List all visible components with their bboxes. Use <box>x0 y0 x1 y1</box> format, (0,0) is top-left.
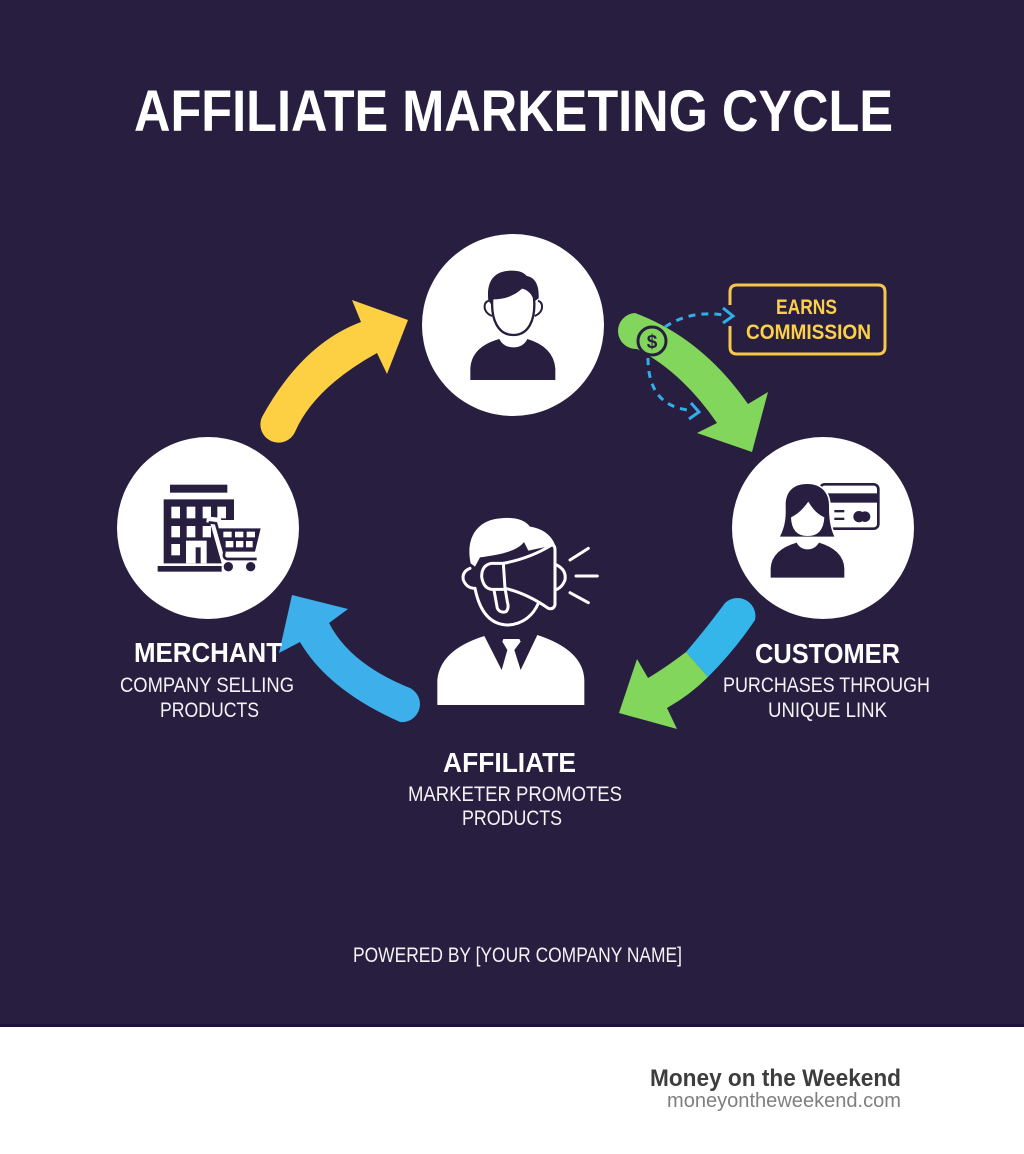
commission dashed arrows <box>648 308 733 419</box>
icon: dollar coin <box>638 327 666 355</box>
callout: earns commission: COMMISSION <box>746 321 871 344</box>
powered by line: POWERED BY [YOUR COMPANY NAME] <box>353 944 682 967</box>
label: merchant: PRODUCTS <box>160 699 259 722</box>
label: merchant: COMPANY SELLING <box>120 674 294 697</box>
label: affiliate: PRODUCTS <box>462 807 562 830</box>
arrow: yellow, merchant to top person <box>260 300 408 443</box>
label: affiliate: MARKETER PROMOTES <box>408 783 622 806</box>
icon: person <box>470 271 555 380</box>
label: customer: UNIQUE LINK <box>768 699 887 722</box>
label: affiliate <box>408 747 622 830</box>
arrow: blue, affiliate to merchant <box>279 595 420 722</box>
arrow: green, top person to customer <box>618 313 768 452</box>
icon: dollar coin: $ <box>647 332 658 353</box>
label: customer: PURCHASES THROUGH <box>723 674 930 697</box>
label: merchant: MERCHANT <box>134 637 282 668</box>
footer brand: Money on the Weekend <box>650 1065 901 1092</box>
label: customer: CUSTOMER <box>755 638 900 669</box>
icon: woman with credit card <box>771 484 879 578</box>
icon: affiliate with megaphone <box>437 518 597 705</box>
footer brand <box>650 1065 901 1112</box>
arrow: blue and green, customer to affiliate <box>619 598 755 729</box>
label: customer <box>723 638 930 722</box>
icon: building with shopping cart <box>158 485 261 572</box>
title: AFFILIATE MARKETING CYCLE <box>134 79 893 144</box>
node: merchant <box>117 437 299 619</box>
footer brand: moneyontheweekend.com <box>667 1089 901 1112</box>
callout: earns commission: EARNS <box>776 296 837 319</box>
node: top person <box>422 234 604 416</box>
label: affiliate: AFFILIATE <box>443 747 576 778</box>
callout: earns commission <box>730 285 885 354</box>
label: merchant <box>120 637 294 722</box>
node: customer <box>732 437 914 619</box>
